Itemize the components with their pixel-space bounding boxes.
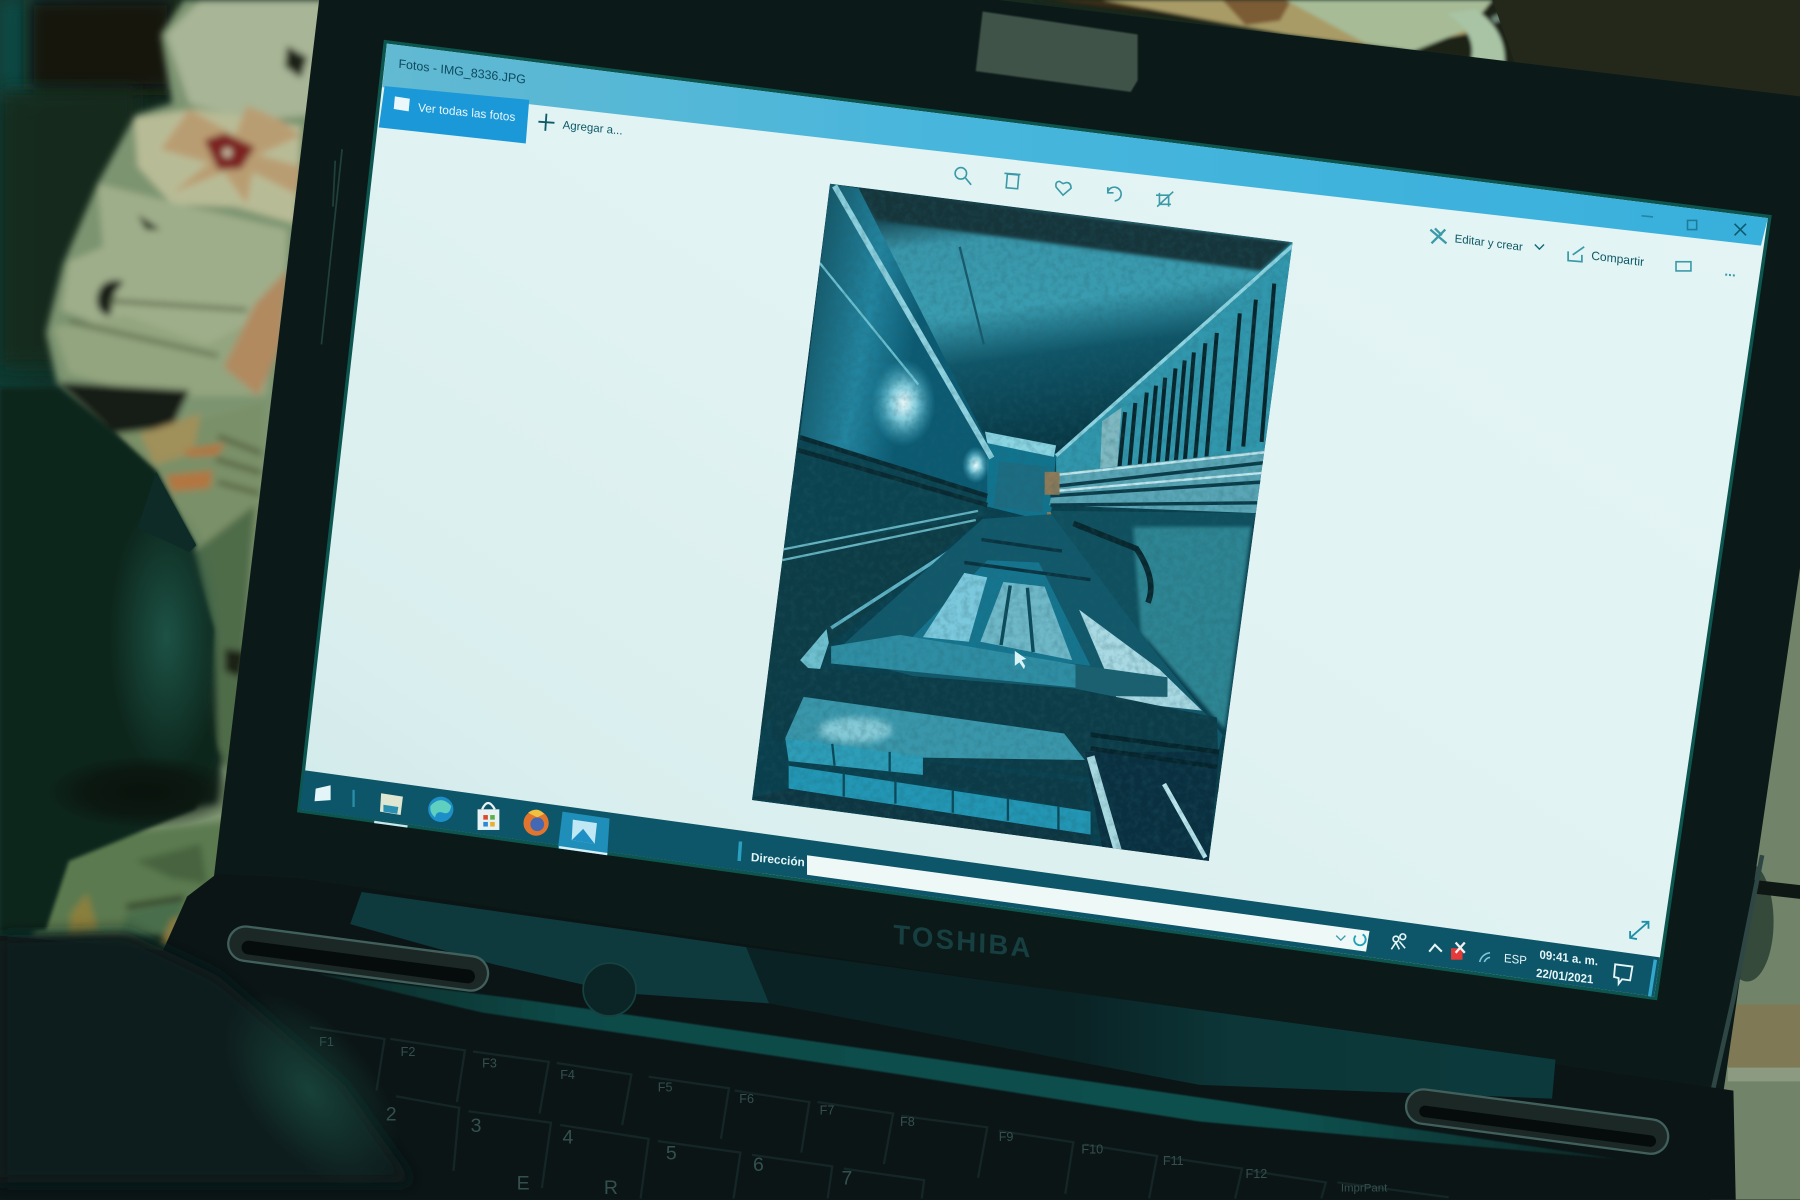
edit and share actions <box>1430 228 1736 280</box>
edit and share actions: Compartir <box>1591 248 1644 269</box>
toolbar icons <box>955 168 1173 207</box>
lower reflective band <box>316 973 1621 1159</box>
right speaker <box>1404 1087 1670 1156</box>
shaft floor lit panels <box>832 514 1223 758</box>
webcam tape <box>976 11 1138 92</box>
keyboard keys: 6 <box>753 1154 764 1176</box>
firefox icon <box>523 810 549 836</box>
keyboard keys: 7 <box>841 1168 852 1190</box>
system tray: 22/01/2021 <box>1536 967 1594 987</box>
ceiling <box>859 188 1293 456</box>
photos app tile <box>558 812 610 855</box>
system tray <box>1391 934 1632 987</box>
laptop base and keyboard <box>0 874 1736 1200</box>
left wall lower <box>784 474 988 550</box>
keyboard keys: F7 <box>820 1104 834 1118</box>
add button <box>538 114 623 138</box>
keyboard keys: F1 <box>319 1035 334 1049</box>
taskbar <box>300 770 1660 996</box>
tab: all photos: Ver todas las fotos <box>418 100 516 124</box>
left speaker <box>226 924 490 993</box>
photo grain <box>746 178 1297 867</box>
power button <box>583 963 636 1016</box>
floral cloth top edge <box>1033 0 1544 71</box>
store icon <box>478 803 499 830</box>
bottom right machinery <box>1085 752 1219 861</box>
start icon <box>315 785 331 801</box>
keyboard keys <box>310 1027 1449 1199</box>
keyboard keys: F12 <box>1246 1167 1267 1181</box>
window controls <box>1642 216 1746 235</box>
right rails <box>1049 450 1266 513</box>
toshiba logo: TOSHIBA <box>893 919 1033 964</box>
window title bar <box>382 44 1768 246</box>
left wall upper <box>800 184 987 497</box>
expand arrow <box>1630 922 1648 939</box>
keyboard keys: F10 <box>1081 1143 1103 1157</box>
keyboard keys: 3 <box>471 1115 482 1137</box>
keyboard keys: F6 <box>739 1092 754 1106</box>
cursor <box>1015 651 1026 669</box>
keyboard keys: F5 <box>658 1081 672 1095</box>
edit and share actions: Editar y crear <box>1454 233 1523 254</box>
keyboard keys: F8 <box>900 1115 915 1129</box>
bottom bricks <box>751 738 1091 846</box>
window title: Fotos - IMG_8336.JPG <box>398 57 526 87</box>
back wall <box>986 443 1056 516</box>
keyboard keys: 2 <box>386 1103 397 1125</box>
hinge panel left <box>350 892 769 1003</box>
system tray: 09:41 a. m. <box>1539 948 1598 968</box>
hinge panel right <box>746 947 1555 1099</box>
keyboard keys: 4 <box>562 1126 573 1148</box>
address toolbar: Dirección <box>751 850 805 869</box>
screen <box>301 44 1768 996</box>
right ventilation wall <box>1056 242 1293 473</box>
system tray: ESP <box>1504 952 1527 968</box>
keyboard keys: R <box>604 1177 618 1199</box>
keyboard keys: F11 <box>1163 1154 1184 1168</box>
background wall bottom right <box>1710 551 1800 1200</box>
keyboard keys: F9 <box>999 1130 1013 1144</box>
person silhouette blurred left <box>0 388 241 936</box>
edge icon <box>428 797 453 822</box>
right lower wall <box>1050 511 1256 643</box>
floral cloth <box>0 0 333 947</box>
address toolbar <box>737 841 1370 952</box>
dark room top right <box>1492 0 1800 99</box>
keyboard keys: ImprPant <box>1341 1183 1388 1195</box>
keyboard keys: 5 <box>666 1142 677 1164</box>
person's arm blurred <box>0 932 432 1200</box>
keyboard keys: E <box>517 1172 530 1194</box>
tab: all photos <box>379 86 529 143</box>
add button: Agregar a... <box>562 120 623 138</box>
keyboard keys: F4 <box>560 1068 575 1082</box>
elevator car top <box>831 635 1076 688</box>
keyboard keys: F2 <box>401 1045 415 1059</box>
edit and share actions: ... <box>1724 263 1736 280</box>
keyboard keys: F3 <box>482 1057 497 1071</box>
elevator shaft photo <box>746 178 1297 867</box>
file explorer icon <box>374 793 408 827</box>
